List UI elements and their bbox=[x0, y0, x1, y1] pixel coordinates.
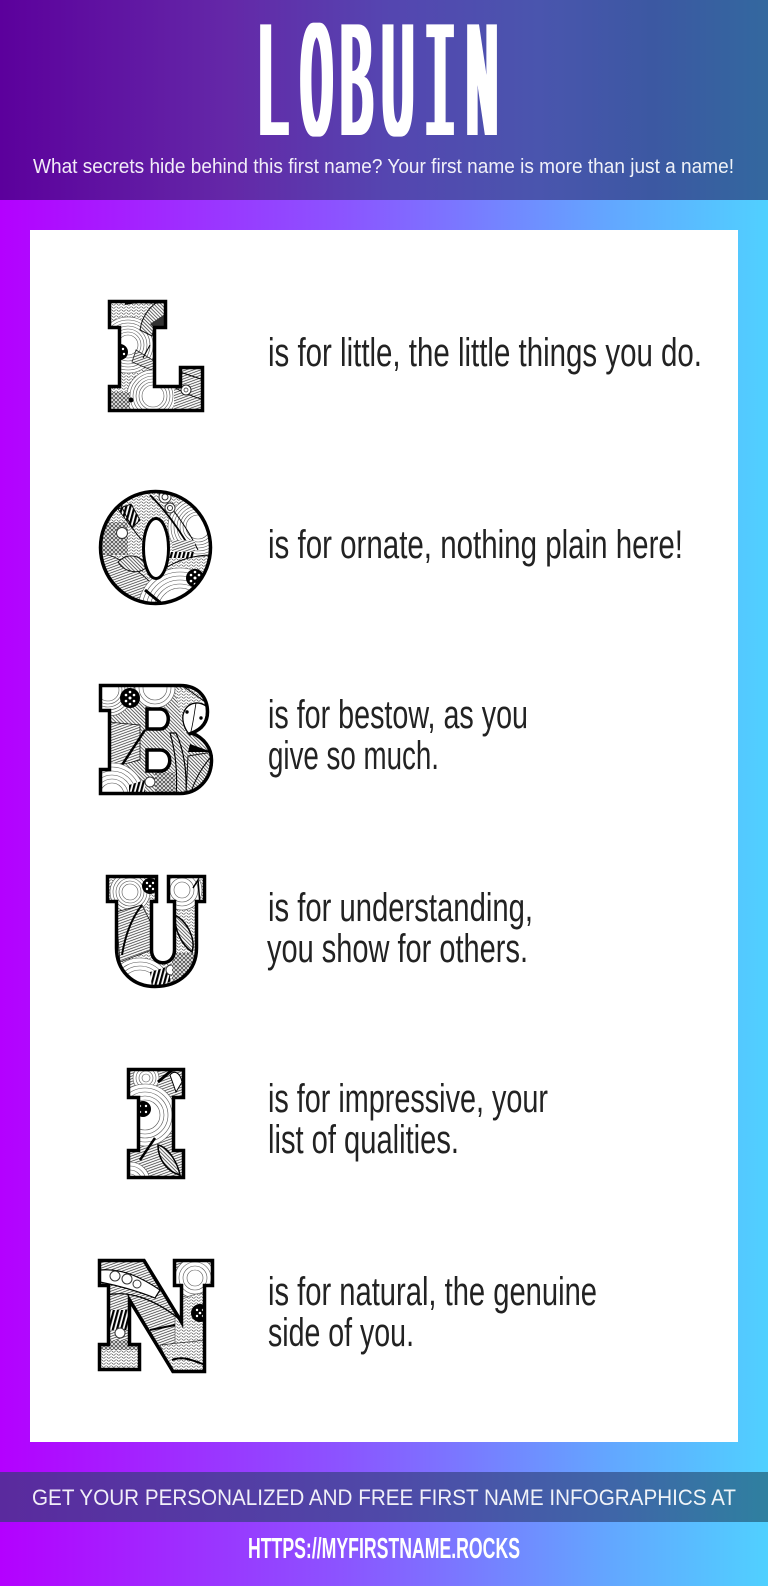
text: U lines: you show for others. bbox=[267, 927, 528, 971]
icon: letter B bbox=[98, 684, 214, 796]
icon: letter N bbox=[96, 1257, 216, 1375]
text: B lines: is for bestow, as you bbox=[268, 693, 528, 737]
text: I lines bbox=[268, 1077, 548, 1162]
text: I lines: list of qualities. bbox=[268, 1118, 459, 1162]
footer band bbox=[0, 1472, 768, 1522]
icon: letter I bbox=[126, 1068, 186, 1180]
website url: HTTPS://MYFIRSTNAME.ROCKS bbox=[248, 1533, 520, 1565]
text: I lines: is for impressive, your bbox=[268, 1077, 548, 1121]
icon: letter U bbox=[106, 874, 206, 988]
text: N lines bbox=[268, 1270, 597, 1355]
icon: letter O bbox=[98, 490, 212, 606]
icon: letter L bbox=[108, 300, 204, 412]
white panel bbox=[30, 230, 738, 1442]
subtitle: What secrets hide behind this first name? Your first name is more than just a name! bbox=[33, 155, 734, 178]
text: B lines bbox=[268, 693, 528, 778]
text: B lines: give so much. bbox=[268, 734, 439, 778]
text: N lines: is for natural, the genuine bbox=[268, 1270, 597, 1314]
title: LOBUIN bbox=[257, 0, 498, 186]
header bbox=[0, 0, 768, 200]
text: U lines: is for understanding, bbox=[268, 886, 533, 930]
text: N lines: side of you. bbox=[268, 1311, 414, 1355]
text: U lines bbox=[267, 886, 533, 971]
